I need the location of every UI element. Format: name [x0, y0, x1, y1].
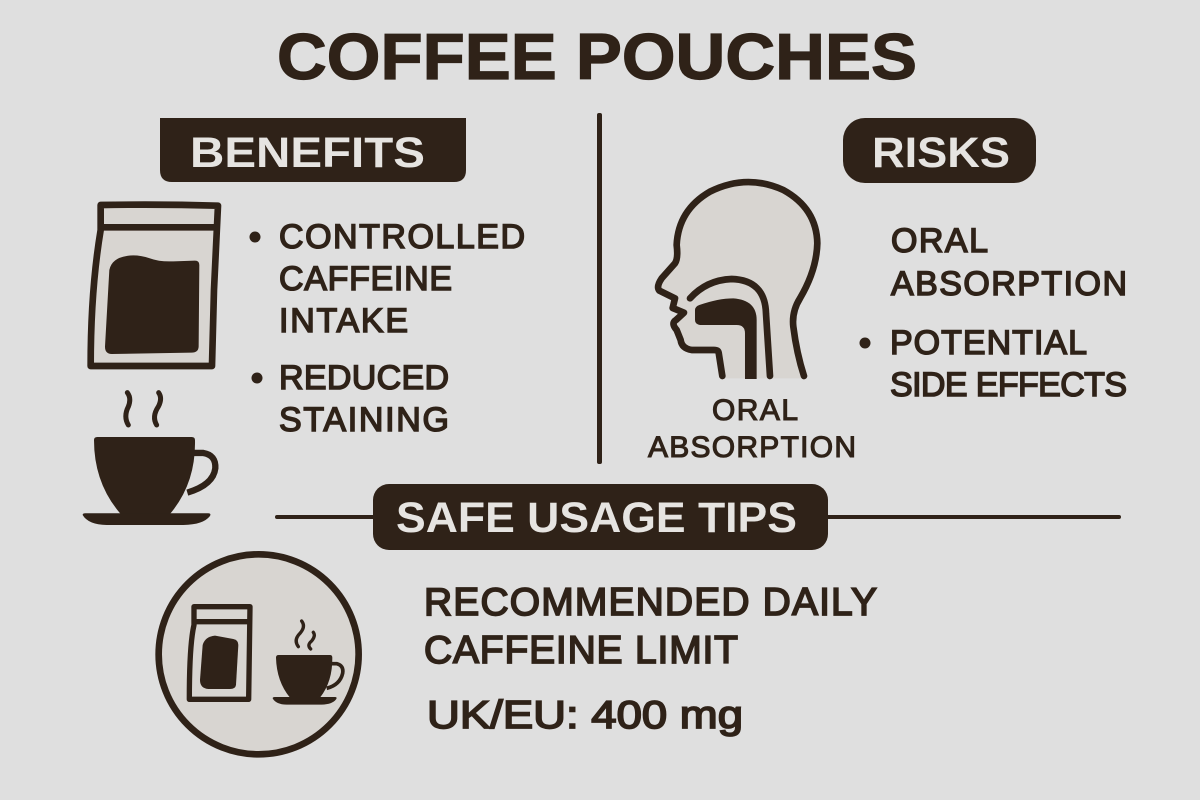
vertical divider [597, 113, 602, 464]
benefits heading badge [160, 118, 466, 182]
risk list: ORAL [891, 222, 988, 260]
benefits heading badge: BENEFITS [190, 129, 425, 177]
risk list: POTENTIAL [890, 324, 1087, 362]
panel: benefits [83, 118, 525, 525]
icon: circle with pouch and cup [159, 554, 359, 754]
daily limit text: RECOMMENDED DAILY [424, 581, 877, 624]
daily limit text: CAFFEINE LIMIT [424, 629, 738, 672]
icon caption: ORAL [712, 394, 798, 427]
icon: coffee pouch [91, 205, 218, 366]
safe usage heading badge: SAFE USAGE TIPS [396, 494, 797, 542]
risk list [860, 222, 1127, 404]
benefit list: CAFFEINE [279, 260, 452, 298]
benefit list: STAINING [279, 401, 449, 439]
risk list: SIDE EFFECTS [890, 366, 1127, 404]
section rule [275, 515, 1121, 519]
benefit list [250, 218, 525, 439]
risk list: ABSORPTION [891, 265, 1127, 303]
icon: steaming coffee cup [83, 393, 215, 525]
icon: head profile [658, 182, 817, 379]
title: COFFEE POUCHES [277, 20, 917, 93]
benefit list: INTAKE [279, 302, 408, 340]
risks heading badge [843, 118, 1036, 183]
icon caption [648, 394, 856, 464]
benefit list: CONTROLLED [279, 218, 525, 256]
daily limit text: UK/EU: 400 mg [427, 694, 743, 737]
icon caption: ABSORPTION [648, 431, 856, 464]
safe usage heading badge [373, 484, 828, 550]
daily limit text [424, 581, 877, 737]
benefit list: REDUCED [279, 359, 449, 397]
panel: safe usage tips [159, 484, 1121, 754]
risks heading badge: RISKS [872, 129, 1010, 177]
panel: risks [648, 118, 1127, 464]
